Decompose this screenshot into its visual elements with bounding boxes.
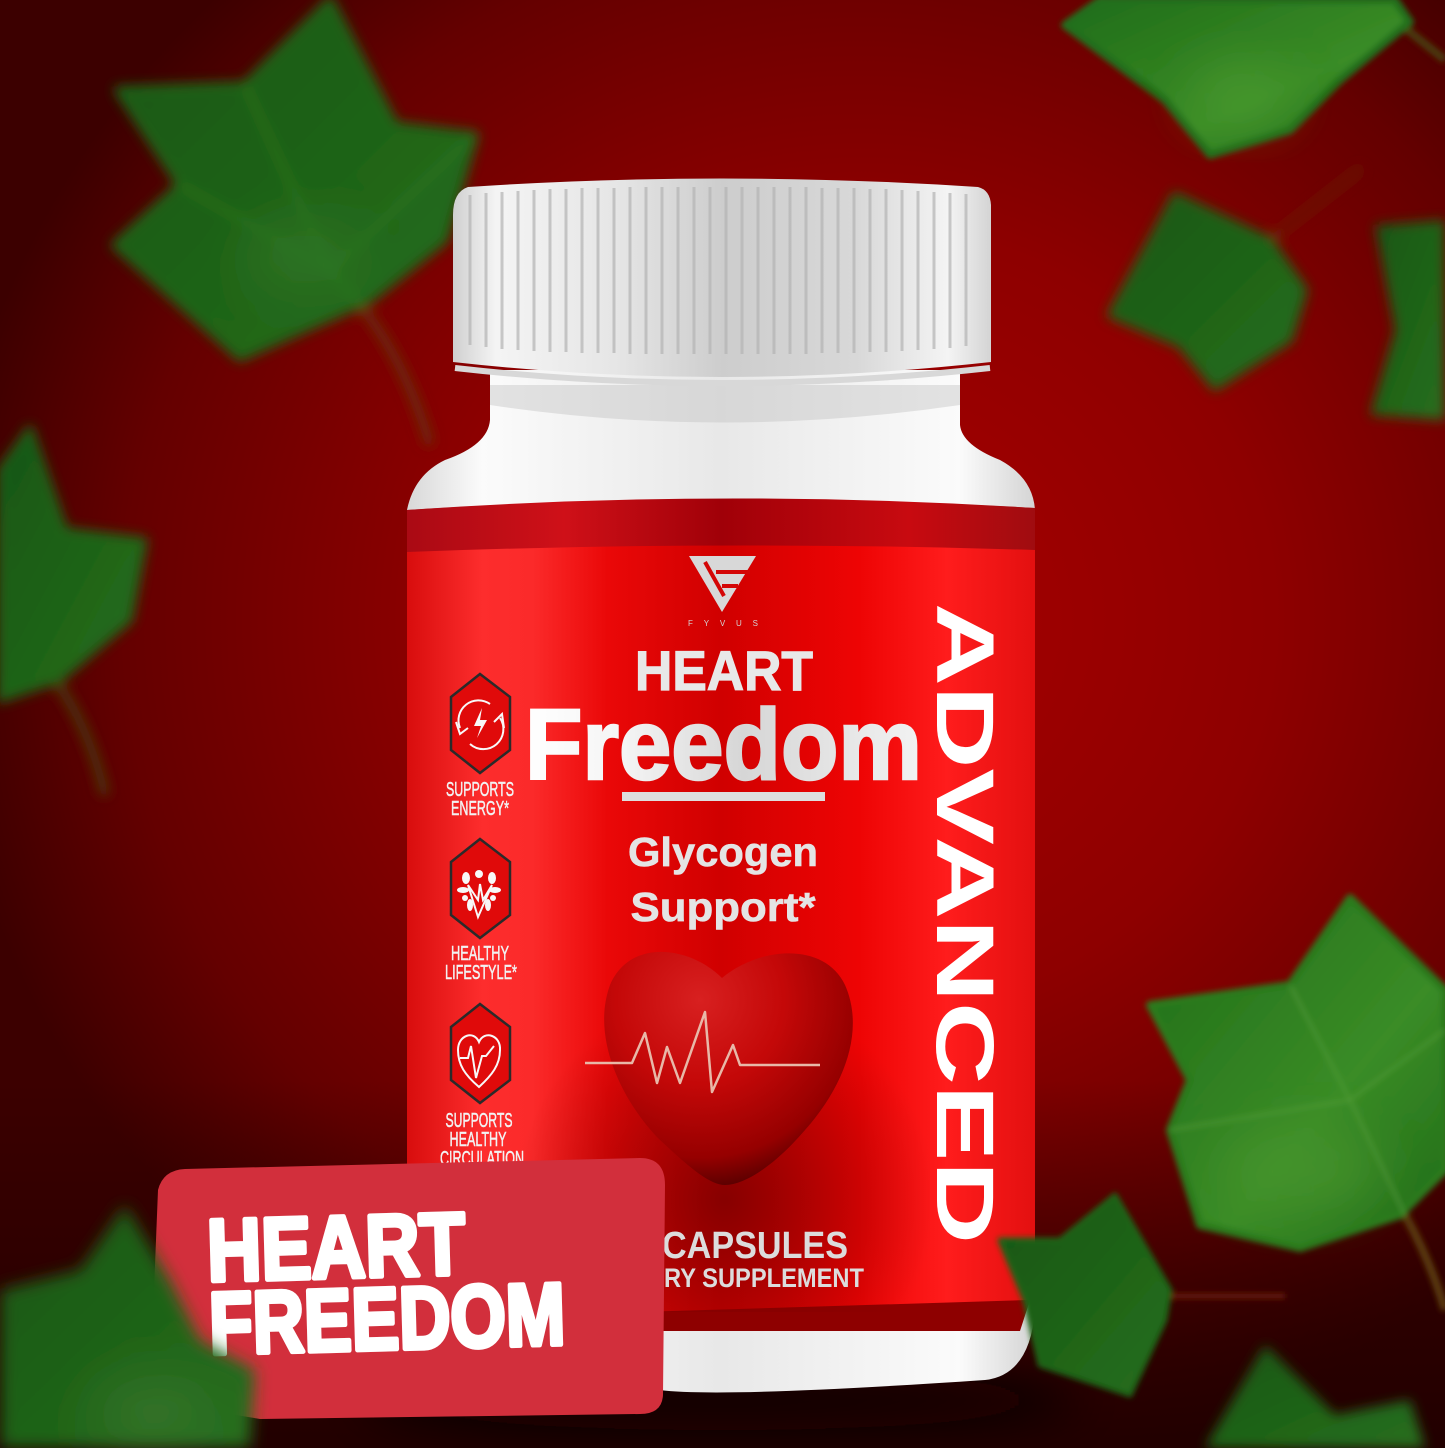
ECG trace bbox=[585, 1012, 820, 1092]
bottle neck and shoulder bbox=[407, 370, 1035, 1392]
cap ribs bbox=[470, 187, 966, 354]
callout card: Heart Freedom bbox=[154, 1158, 665, 1419]
card title: HEART bbox=[206, 1194, 466, 1300]
icon: heart with pulse and runner bbox=[458, 1035, 500, 1087]
Glycogen Support subtitle: Support* bbox=[630, 884, 816, 930]
hexagon bbox=[451, 674, 510, 773]
label: main red area bbox=[407, 499, 1035, 1317]
cap body bbox=[453, 178, 991, 377]
label: bottom dark band bbox=[640, 1300, 1030, 1331]
card shape bbox=[154, 1158, 665, 1419]
cap lower rim bbox=[455, 368, 990, 383]
Freedom heading: Freedom bbox=[525, 689, 922, 801]
leaf: right upper bbox=[1110, 168, 1362, 388]
dietary supplement text: RY SUPPLEMENT bbox=[664, 1263, 864, 1293]
badge text: HEALTHY bbox=[451, 943, 509, 965]
Glycogen Support subtitle bbox=[628, 829, 818, 930]
badge text: CIRCULATION bbox=[440, 1148, 524, 1170]
heart illustration bbox=[585, 952, 853, 1185]
leaf: bottom left foreground bbox=[0, 1205, 255, 1448]
logo mark bbox=[689, 556, 756, 612]
badge: supports healthy circulation bbox=[440, 1004, 524, 1170]
icon: lightning in cycle arrows bbox=[456, 700, 504, 749]
brand logo bbox=[688, 556, 758, 628]
badge text bbox=[446, 779, 514, 820]
badge text: HEALTHY bbox=[450, 1129, 506, 1151]
leaf: right edge bbox=[1370, 220, 1445, 420]
badge text bbox=[445, 943, 517, 984]
badge text bbox=[440, 1110, 524, 1170]
badge: supports energy bbox=[446, 674, 514, 820]
leaf: top left bbox=[115, 0, 475, 445]
card title bbox=[206, 1194, 566, 1373]
leaf: right lower large bbox=[1150, 898, 1445, 1310]
hexagon bbox=[451, 839, 510, 938]
badge text: SUPPORTS bbox=[446, 1110, 512, 1132]
cap bbox=[453, 178, 991, 383]
label: central shading bbox=[510, 990, 930, 1312]
badge text: ENERGY* bbox=[451, 798, 509, 820]
badge: healthy lifestyle bbox=[445, 839, 517, 984]
leaf: top right bbox=[1065, 0, 1445, 155]
capsules count text: CAPSULES bbox=[662, 1225, 848, 1267]
ADVANCED vertical wordmark: ADVANCED bbox=[919, 603, 1010, 1244]
underline bbox=[622, 792, 825, 801]
card title: FREEDOM bbox=[208, 1264, 566, 1373]
badge text: SUPPORTS bbox=[446, 779, 514, 801]
neck shading bbox=[490, 385, 960, 422]
Glycogen Support subtitle: Glycogen bbox=[628, 829, 818, 875]
background: dark floor shading bbox=[0, 1080, 1445, 1448]
brand name: FYVUS bbox=[688, 619, 758, 628]
leaf: bottom edge bbox=[1205, 1345, 1425, 1448]
hexagon bbox=[451, 1004, 510, 1103]
HEART heading: HEART bbox=[635, 639, 813, 702]
leaf: bottle lower right bbox=[1000, 1195, 1285, 1395]
floor shadow under bottle bbox=[360, 1370, 1080, 1430]
badge text: LIFESTYLE* bbox=[445, 962, 517, 984]
leaf: left middle bbox=[0, 428, 145, 795]
icon: person tree bbox=[457, 870, 501, 917]
product name bbox=[525, 639, 922, 801]
bottle bbox=[407, 178, 1035, 1392]
label: top dark band bbox=[407, 498, 1035, 552]
heart shape bbox=[604, 952, 853, 1185]
